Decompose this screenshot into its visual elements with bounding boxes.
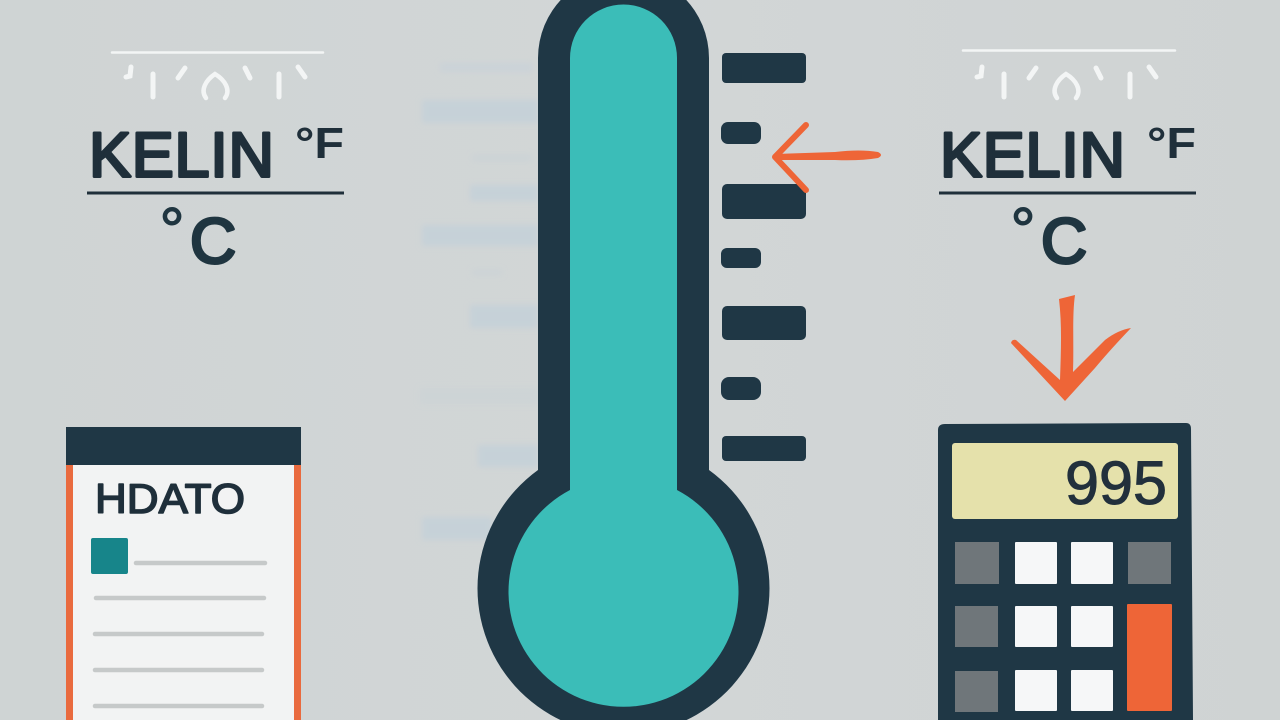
thermometer fill (508, 5, 738, 707)
calculator screen (952, 443, 1178, 519)
thermometer (477, 0, 770, 720)
document card (66, 427, 301, 720)
white rule and marks (112, 52, 323, 98)
divider line (87, 192, 344, 194)
heading: HDATO: HDATO (95, 475, 245, 522)
orange side edges (66, 460, 301, 720)
unit: degrees C: ° (1011, 195, 1035, 262)
display number: 995 (1065, 449, 1167, 517)
unit: degrees C (160, 195, 236, 277)
arrow pointing down at calculator (1011, 295, 1131, 401)
heading: KELIN: KELIN (940, 120, 1125, 190)
right unit panel (939, 50, 1196, 277)
scale tick marks (721, 53, 806, 461)
arrow pointing left at scale (775, 125, 881, 190)
unit: degrees C: C (190, 205, 236, 277)
dark header bar (66, 427, 301, 465)
teal square (91, 538, 128, 574)
calculator keys (955, 542, 1172, 712)
calculator body (938, 423, 1193, 720)
faded background bars beside thermometer (420, 63, 538, 540)
calculator (938, 423, 1193, 720)
divider line (939, 192, 1196, 194)
white rule and marks (963, 50, 1175, 98)
unit: degrees C: ° (160, 195, 184, 262)
unit: degrees F: °F (295, 119, 344, 168)
left unit panel (87, 52, 344, 277)
unit: degrees F: °F (1147, 119, 1196, 168)
thermometer outline (477, 0, 770, 720)
heading: KELIN: KELIN (89, 120, 274, 190)
unit: degrees C (1011, 195, 1087, 277)
unit: degrees C: C (1041, 205, 1087, 277)
text lines (95, 563, 265, 706)
paper (73, 465, 294, 720)
